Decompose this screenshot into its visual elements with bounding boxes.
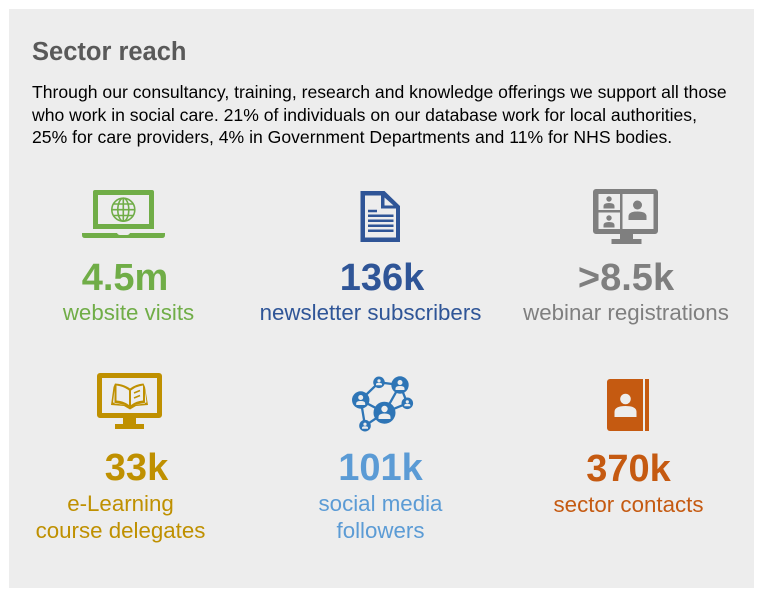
intro text: 25% for care providers, 4% in Government Departments and 11% for NHS bodies. [32,127,672,147]
stat: newsletter subscribers: 136k [340,257,424,299]
stat: sector contacts: 370k [586,448,671,490]
intro text: who work in social care. 21% of individuals on our database work for local authorities, [32,104,697,124]
stat: e-learning delegates: 33k [105,447,168,489]
label: e-learning delegates [36,491,205,543]
label: newsletter subscribers: newsletter subscribers [260,300,481,325]
heading: Sector reach [32,38,186,66]
label: sector contacts: sector contacts [554,492,703,517]
label: webinar registrations: webinar registrations [523,300,729,325]
label: e-learning delegates: e-Learning [67,491,174,516]
label: website visits: website visits [63,300,194,325]
stat: website visits: 4.5m [82,257,168,299]
label: social media followers [319,491,442,543]
label: social media followers: followers [336,518,424,543]
intro text [32,82,727,147]
stat: webinar registrations: >8.5k [578,257,674,299]
intro text: Through our consultancy, training, research and knowledge offerings we support all those [32,82,727,102]
label: social media followers: social media [319,491,442,516]
stat: social media followers: 101k [338,447,423,489]
label: e-learning delegates: course delegates [36,518,205,543]
